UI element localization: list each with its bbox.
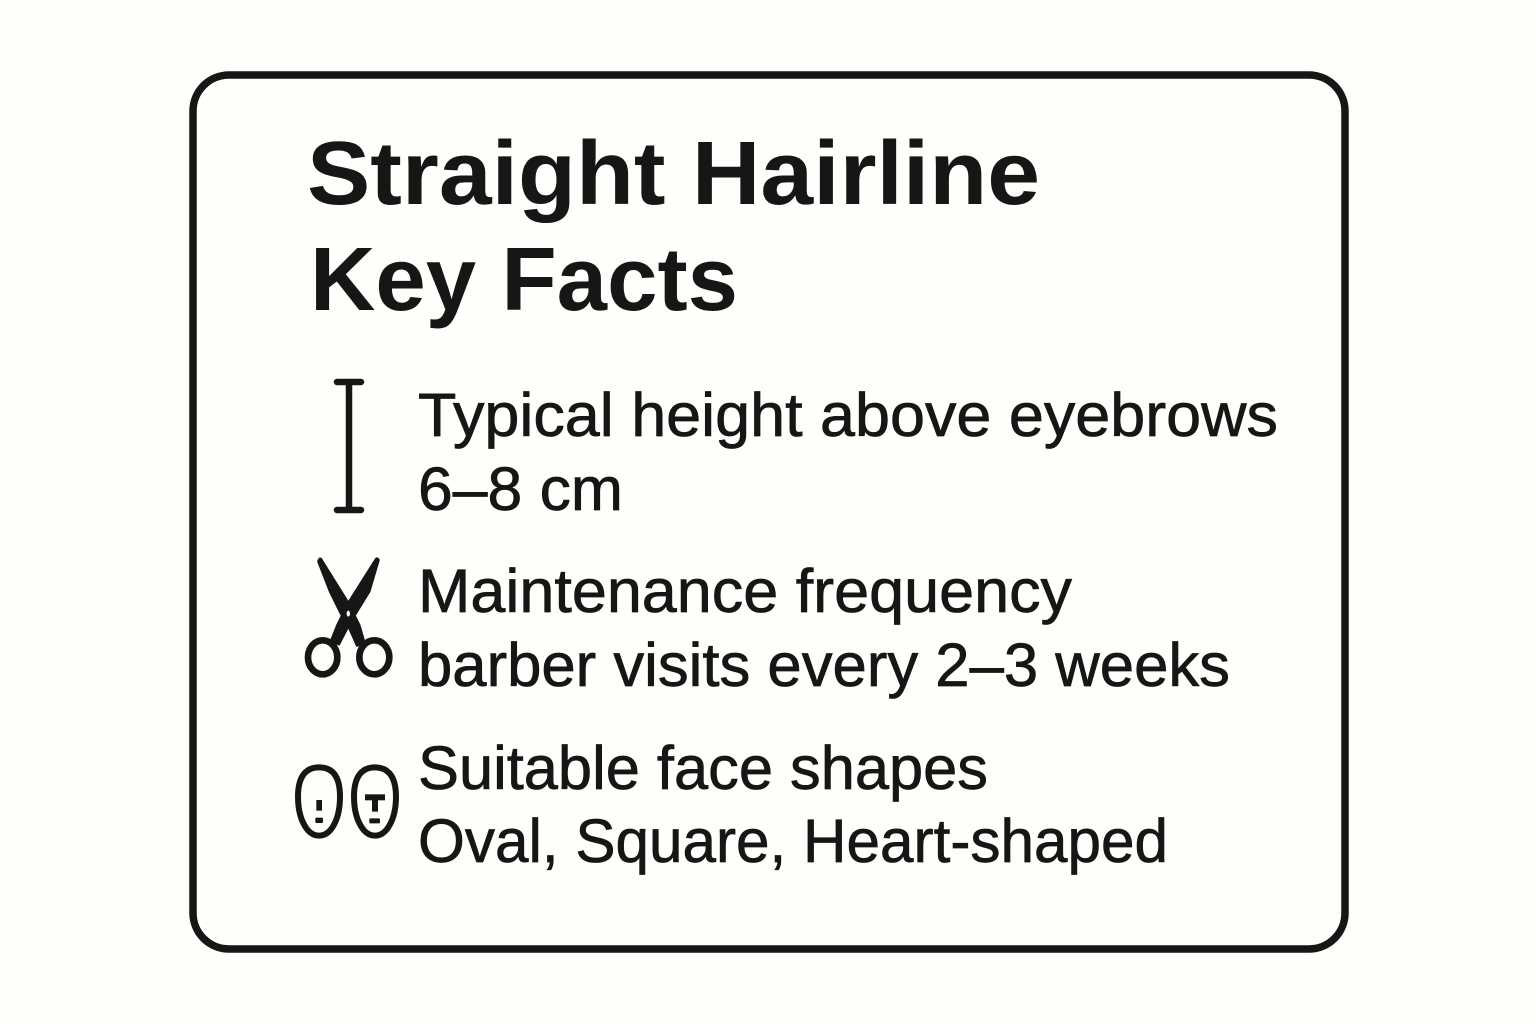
- title: [307, 124, 1040, 330]
- text: suitable face shapes: [418, 734, 1168, 875]
- title: Straight Hairline: [307, 124, 1040, 224]
- text: suitable face shapes: Suitable face shapes: [418, 734, 988, 802]
- icon: scissors: [308, 558, 389, 674]
- text: maintenance frequency: [418, 557, 1230, 699]
- icon: height measure: [337, 382, 361, 510]
- panel: key facts card: [193, 75, 1345, 949]
- text: maintenance frequency: barber visits every 2–3 weeks: [418, 631, 1230, 699]
- text: maintenance frequency: Maintenance frequency: [418, 557, 1073, 625]
- title: Key Facts: [310, 230, 738, 330]
- text: typical height: 6–8 cm: [418, 455, 623, 523]
- text: typical height: [418, 381, 1278, 523]
- text: typical height: Typical height above eyebrows: [418, 381, 1278, 449]
- icon: face shapes: [298, 767, 396, 836]
- text: suitable face shapes: Oval, Square, Heart-shaped: [418, 807, 1168, 875]
